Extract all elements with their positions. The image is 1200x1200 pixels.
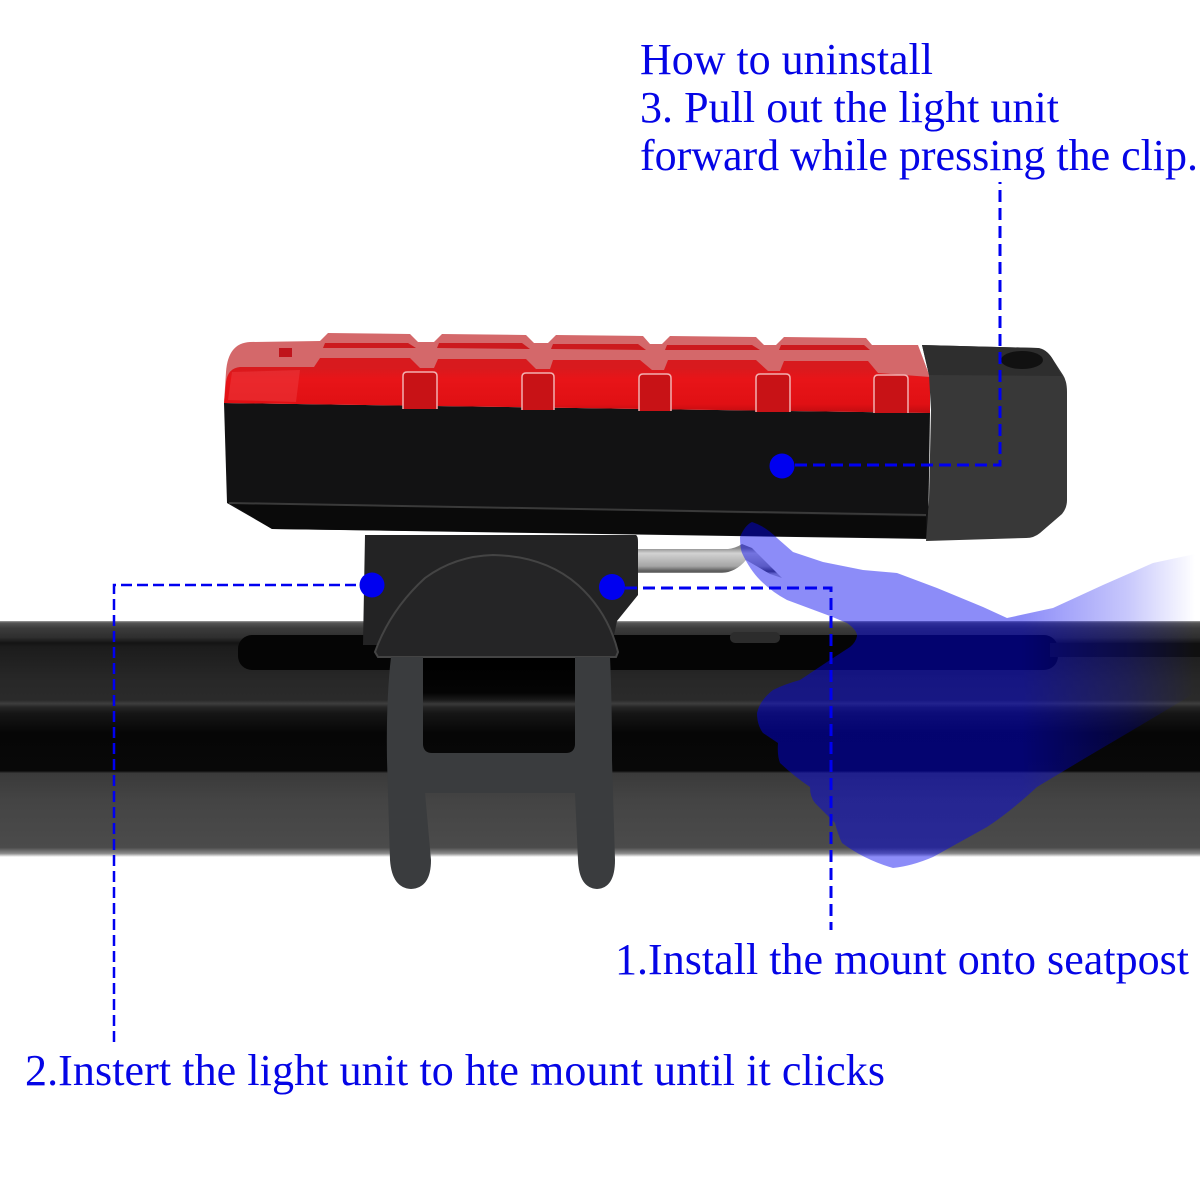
- dot: light unit: [770, 454, 794, 478]
- uninstall instructions: forward while pressing the clip.: [640, 131, 1198, 180]
- strap window shadow: [420, 657, 578, 705]
- red lens vertical ribs: [403, 372, 908, 413]
- dot: mount left: [360, 572, 384, 598]
- hand pressing the clip: [740, 522, 1200, 868]
- uninstall instructions: [640, 35, 1198, 180]
- leader line: mount left to step 2: [114, 585, 372, 1042]
- red lens upper ribs: [323, 343, 870, 350]
- dot: mount right: [599, 574, 625, 600]
- uninstall instructions: How to uninstall: [640, 35, 933, 84]
- light unit: [224, 333, 1067, 541]
- step 1 text: 1.Install the mount onto seatpost: [615, 935, 1189, 984]
- mount dome cap: [375, 555, 618, 657]
- step 2 text: 2.Instert the light unit to hte mount until it clicks: [25, 1046, 885, 1095]
- small lens marker: [279, 348, 292, 357]
- black light body: [224, 403, 930, 539]
- leader line: light unit to uninstall note: [795, 182, 1000, 465]
- red lens top face: [224, 333, 930, 413]
- rubber end cap: [922, 345, 1067, 541]
- release clip lever: [636, 544, 782, 578]
- red lens front face: [224, 358, 930, 413]
- leader line: mount right to step 1: [625, 588, 831, 930]
- mount: [363, 535, 638, 889]
- mount block: [363, 535, 638, 645]
- uninstall instructions: 3. Pull out the light unit: [640, 83, 1059, 132]
- rubber strap: [387, 657, 615, 889]
- seatpost tube: [0, 621, 1200, 857]
